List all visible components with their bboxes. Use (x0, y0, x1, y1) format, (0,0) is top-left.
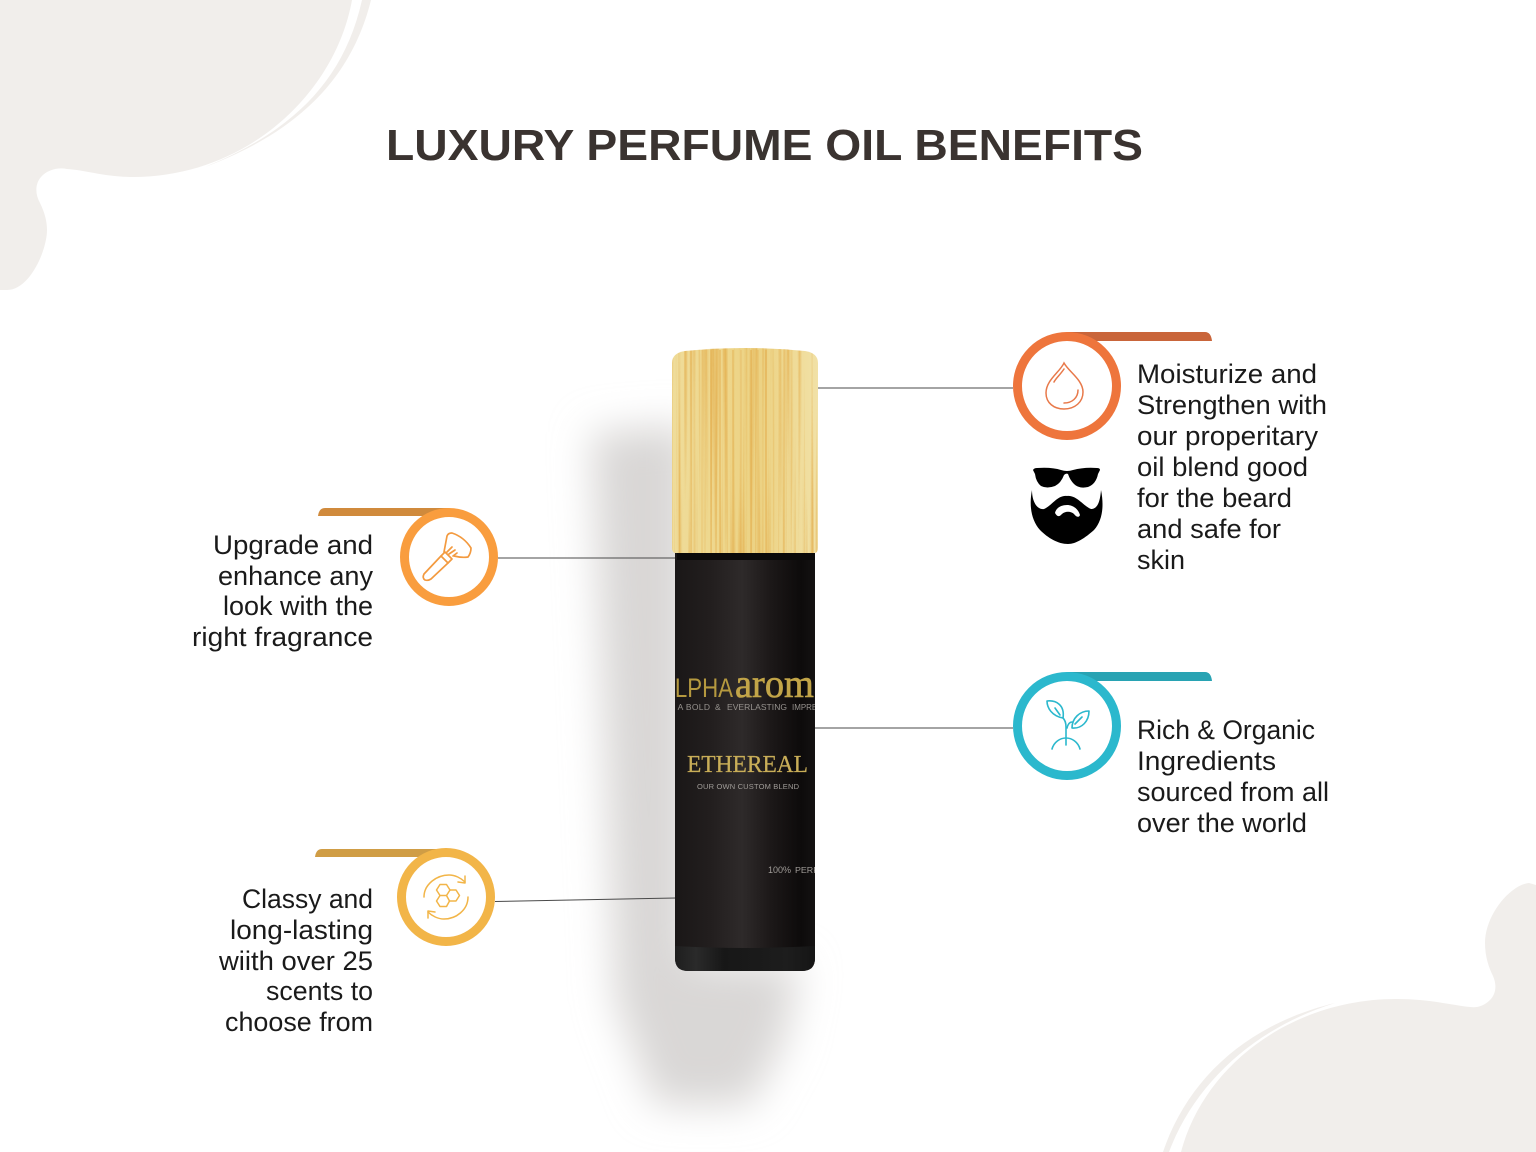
text: our properitary (1137, 421, 1319, 451)
text: oil blend good (1137, 452, 1308, 482)
icon: oil drop (1046, 363, 1083, 409)
text: wiith over 25 (218, 946, 373, 976)
brand name: ALPHA (660, 673, 733, 703)
accent bar (315, 849, 446, 857)
text: long-lasting (230, 915, 373, 945)
brand tagline: MAKE A BOLD (650, 702, 710, 712)
bottle body (675, 553, 815, 971)
accent bar (1067, 332, 1212, 341)
text: Rich & Organic (1137, 715, 1315, 745)
accent bar (318, 508, 449, 516)
text: skin (1137, 545, 1185, 575)
text: over the world (1137, 808, 1307, 838)
text: look with the (223, 591, 373, 621)
icon: honeycomb cycle (424, 875, 468, 919)
bamboo cap (672, 345, 818, 553)
text: right fragrance (192, 622, 373, 652)
text: Ingredients (1137, 746, 1276, 776)
text: Upgrade and (213, 530, 373, 560)
text: Moisturize and (1137, 359, 1317, 389)
brand tagline: & (715, 702, 721, 712)
text: choose from (225, 1007, 373, 1037)
accent bar (1067, 672, 1212, 681)
bottle neck (677, 553, 815, 560)
brand tagline: IMPRESSION (792, 703, 842, 712)
decorative blob: bottom right (1163, 883, 1536, 1152)
decorative blob: top left (0, 0, 371, 290)
text: for the beard (1137, 483, 1292, 513)
text: scents to (266, 976, 373, 1006)
bottle label (676, 678, 815, 873)
title: LUXURY PERFUME OIL BENEFITS (386, 121, 1143, 170)
purity note: PERFUME OIL (795, 865, 855, 875)
callout: moisturize (1018, 332, 1327, 575)
text (192, 530, 374, 652)
connector lines (495, 388, 1013, 902)
brand name: aroma (735, 661, 831, 706)
text (218, 884, 373, 1037)
icon: makeup brush (423, 533, 471, 580)
purity note: 100% (768, 865, 791, 875)
callout: ingredients (1018, 672, 1329, 838)
text: Classy and (242, 884, 373, 914)
bottle base band (675, 946, 815, 971)
blend line: OUR OWN CUSTOM BLEND (697, 782, 800, 791)
text (1137, 715, 1329, 838)
icon: sprout (1047, 701, 1089, 749)
icon: bearded man with sunglasses (1031, 468, 1103, 544)
text (1137, 359, 1327, 575)
text: enhance any (218, 561, 374, 591)
text: Strengthen with (1137, 390, 1327, 420)
text: and safe for (1137, 514, 1281, 544)
bottle shadow (592, 425, 800, 1105)
text: sourced from all (1137, 777, 1329, 807)
scent name: ETHEREAL (687, 752, 808, 778)
ring (402, 852, 490, 942)
product bottle (672, 348, 818, 971)
ring (404, 512, 494, 602)
callout: long-lasting (218, 849, 490, 1037)
ring (1018, 336, 1116, 436)
brand tagline: EVERLASTING (727, 702, 787, 712)
callout: fragrance look (192, 508, 494, 652)
ring (1018, 676, 1116, 776)
